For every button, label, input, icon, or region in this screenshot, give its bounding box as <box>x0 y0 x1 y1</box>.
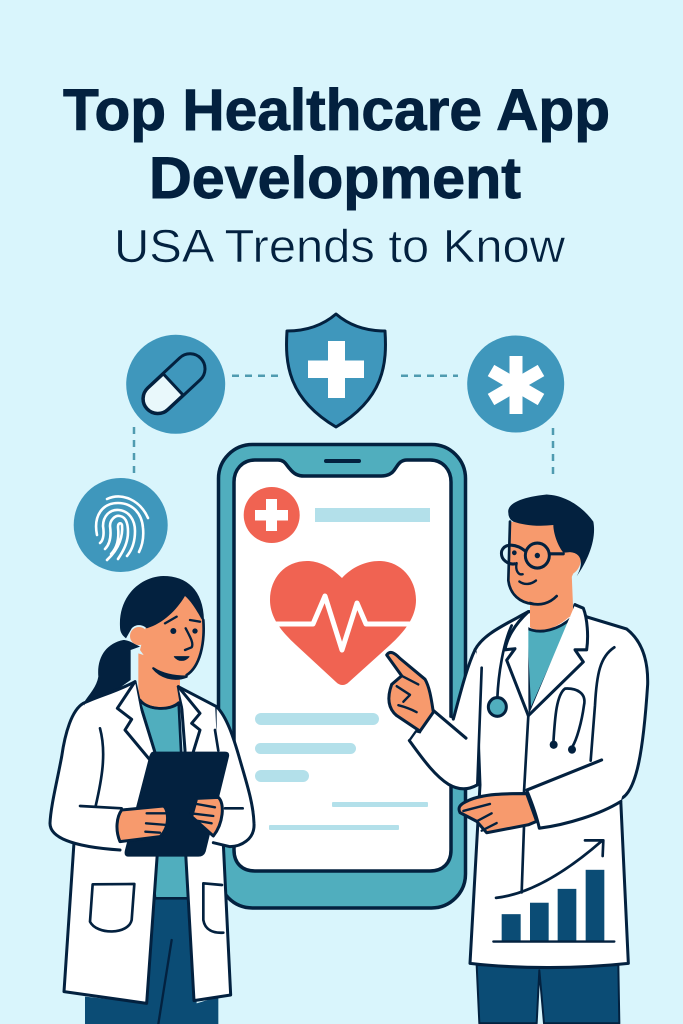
trousers <box>477 965 619 1023</box>
left sleeve <box>50 703 123 850</box>
pointing hand <box>387 652 433 731</box>
right sleeve <box>212 707 254 847</box>
dashed connectors <box>134 376 553 478</box>
ponytail <box>83 640 140 703</box>
head <box>140 595 204 677</box>
icon: fingerprint <box>74 478 168 572</box>
lower sleeve <box>527 757 633 828</box>
shirt <box>526 617 573 712</box>
title: Development <box>149 146 521 211</box>
head <box>508 522 581 604</box>
woman doctor <box>50 576 254 1024</box>
app badge: cross <box>244 487 300 543</box>
neck <box>138 653 180 712</box>
coat body <box>470 605 648 968</box>
shirt <box>139 700 188 898</box>
pointing arm sleeve <box>409 650 482 789</box>
speaker <box>324 459 361 463</box>
coat left panel <box>64 682 157 1003</box>
icon: shield with cross <box>287 314 385 427</box>
pockets <box>90 884 134 931</box>
lapels <box>117 682 200 760</box>
glasses <box>501 543 563 568</box>
icon: pill <box>126 335 225 434</box>
man doctor <box>387 495 648 1023</box>
lower hand <box>459 794 537 833</box>
lapels <box>505 612 528 716</box>
trousers <box>85 893 218 1024</box>
hands <box>117 806 168 842</box>
app content lines <box>255 713 428 830</box>
phone screen <box>234 460 451 871</box>
stethoscope <box>488 626 584 754</box>
title: Top Healthcare App <box>63 78 610 143</box>
phone <box>218 444 466 908</box>
coat right panel <box>178 687 231 1001</box>
subtitle: USA Trends to Know <box>114 220 566 272</box>
phone body <box>218 444 466 908</box>
coat seams <box>522 647 614 892</box>
heart with pulse <box>270 561 416 685</box>
title <box>63 78 610 211</box>
tablet <box>125 752 229 857</box>
neck <box>530 574 573 630</box>
icon: asterisk <box>467 336 564 432</box>
app header bar <box>315 508 430 522</box>
growth chart <box>493 840 614 942</box>
